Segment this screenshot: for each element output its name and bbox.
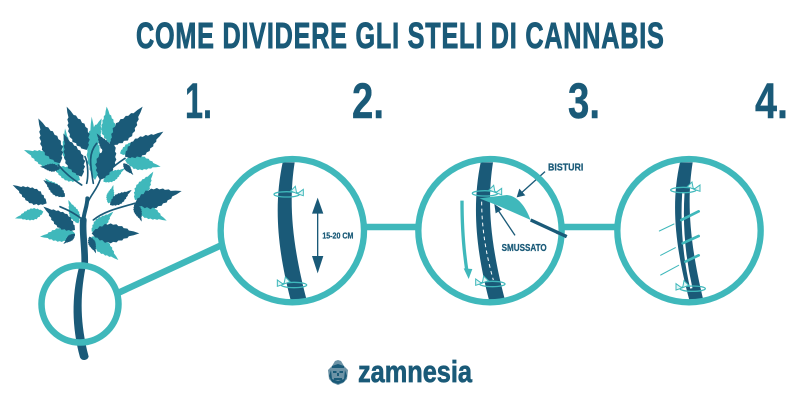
top tie <box>671 182 700 193</box>
connector: circle 3 to circle 4 <box>562 224 617 230</box>
scalpel blade <box>479 195 531 220</box>
ring <box>221 159 364 302</box>
arrow to blunt edge <box>494 204 515 235</box>
direction arrow <box>460 201 472 279</box>
icon: cannabis plant <box>9 100 184 360</box>
teal leaves <box>14 106 170 266</box>
arrow to blade <box>517 172 545 197</box>
label: bisturi: BISTURI <box>548 162 584 173</box>
icon: monkey head <box>328 360 348 385</box>
stem <box>675 162 703 300</box>
circle 2: stem with measure <box>221 159 364 302</box>
step number 4: 4. <box>755 73 788 129</box>
bottom tie <box>676 281 705 291</box>
wordmark: zamnesia <box>358 354 473 389</box>
step number 1: 1. <box>185 73 212 129</box>
step number 2: 2. <box>352 73 384 129</box>
measure label: 15-20 CM <box>322 231 353 241</box>
bottom tie <box>476 276 505 287</box>
bottom tie <box>277 277 307 288</box>
split gap <box>683 193 691 288</box>
connector: circle 2 to circle 3 <box>364 224 418 230</box>
top tie <box>472 185 502 196</box>
label: smussato: SMUSSATO <box>502 243 547 254</box>
connector: plant to circle 2 <box>118 244 224 293</box>
top tie <box>274 186 303 197</box>
step number 3: 3. <box>568 73 600 129</box>
dark leaves <box>9 100 184 255</box>
stem <box>476 162 505 300</box>
small magnifier circle <box>42 266 118 342</box>
circle 4: grafted stem with stitches <box>617 159 761 302</box>
dashed cut line <box>482 202 493 280</box>
ring <box>418 159 562 302</box>
circle 3: cutting with scalpel <box>418 159 584 302</box>
stem <box>278 162 307 300</box>
ring <box>617 159 761 302</box>
title: COME DIVIDERE GLI STELI DI CANNABIS <box>136 16 664 56</box>
stitches <box>659 211 699 275</box>
logo: zamnesia <box>328 354 473 389</box>
measure arrow <box>312 198 323 273</box>
handle overlap <box>557 232 567 237</box>
stems <box>58 143 135 265</box>
scalpel handle <box>531 220 567 237</box>
stem inside small circle <box>74 268 89 360</box>
